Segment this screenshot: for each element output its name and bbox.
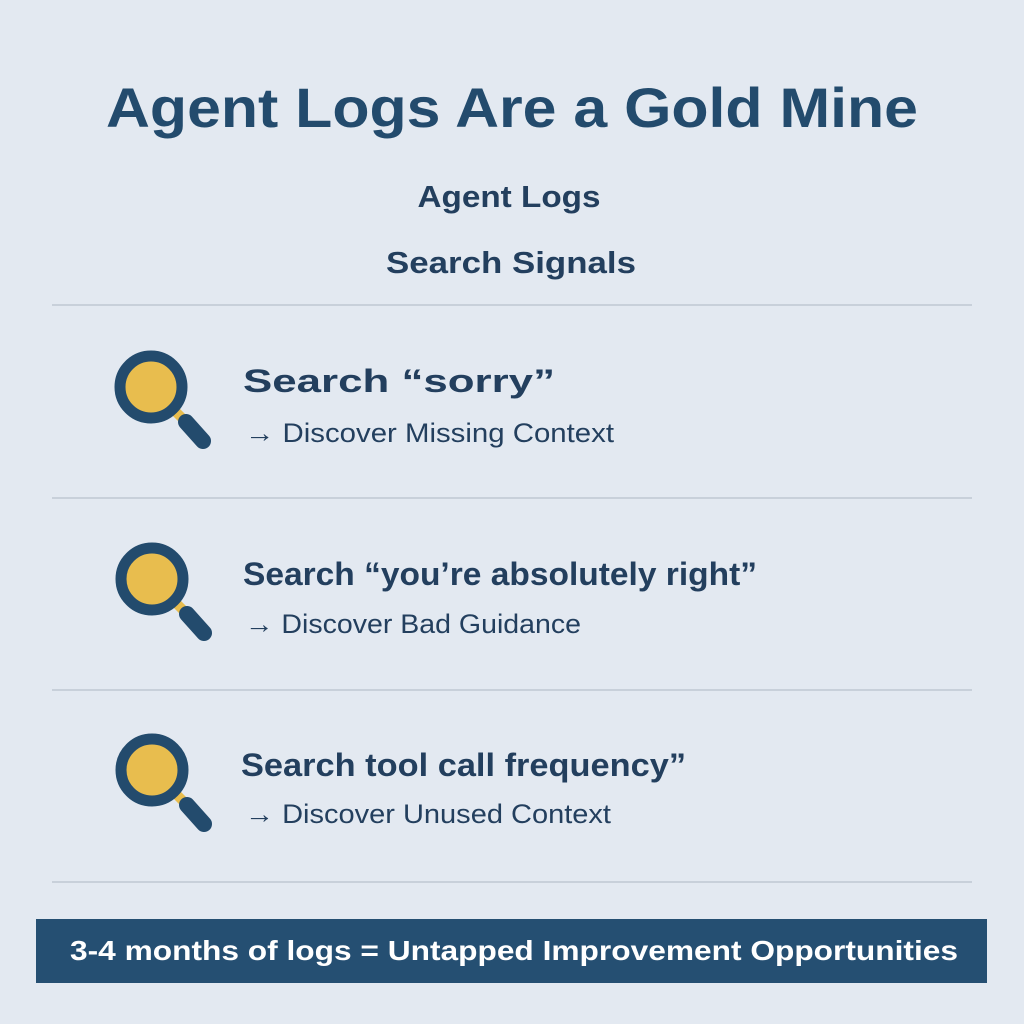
subtitle: search signals: Search Signals — [386, 245, 636, 280]
item 1 — [120, 356, 615, 448]
banner text: 3-4 months of logs = Untapped Improvement Opportunities — [70, 935, 958, 966]
subtitle: agent logs: Agent Logs — [418, 179, 600, 214]
heading 2: Search “you’re absolutely right” — [243, 556, 757, 592]
heading 3: Search tool call frequency” — [241, 747, 686, 783]
title: Agent Logs Are a Gold Mine — [106, 76, 918, 139]
icon: magnifier 2 — [121, 548, 204, 633]
subtext 3: → Discover Unused Context — [245, 799, 612, 829]
subtext 2: → Discover Bad Guidance — [245, 609, 581, 639]
subtext 1: → Discover Missing Context — [245, 418, 615, 448]
heading 1: Search “sorry” — [243, 363, 555, 399]
icon: magnifier 1 — [120, 356, 203, 441]
icon: magnifier 3 — [121, 739, 204, 824]
banner — [36, 919, 987, 983]
item 2 — [121, 548, 757, 639]
item 3 — [121, 739, 686, 829]
